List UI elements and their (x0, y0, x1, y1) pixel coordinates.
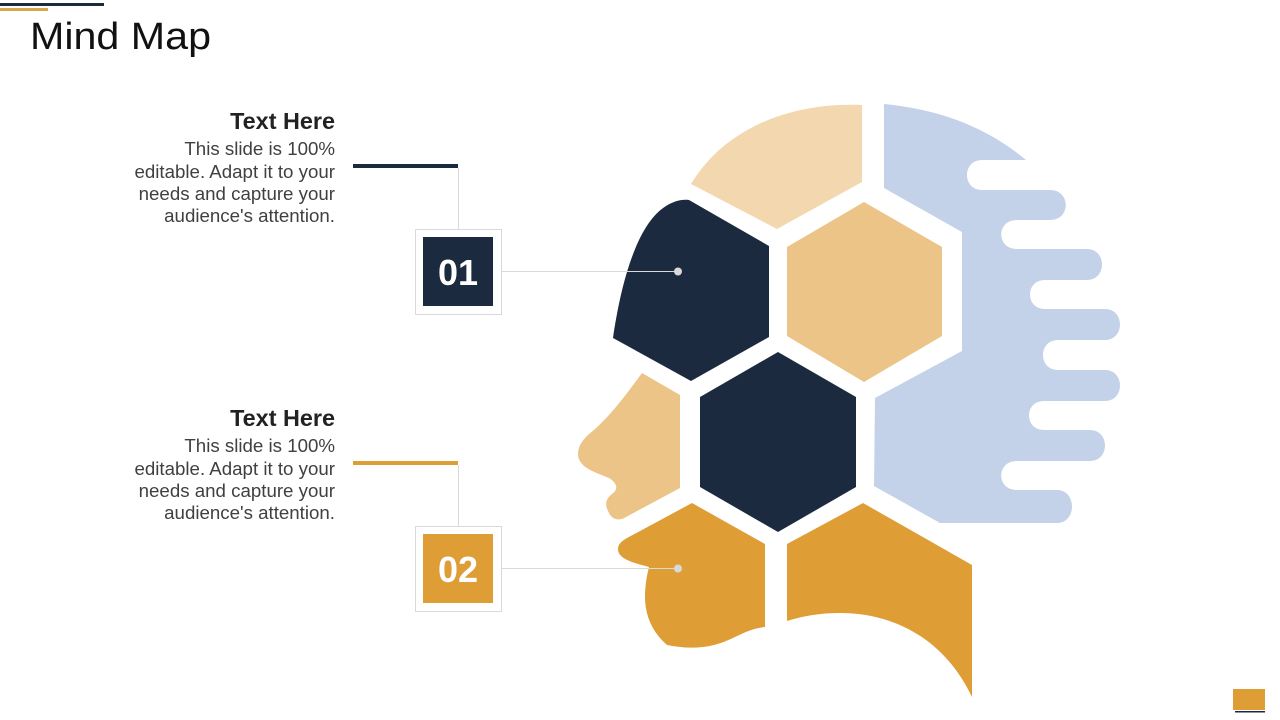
body text: editable. Adapt it to your (134, 161, 335, 182)
badge outline (416, 230, 502, 314)
connector bar (353, 461, 458, 465)
connector lines (458, 168, 678, 272)
body text: needs and capture your (139, 183, 335, 204)
badge fill (423, 237, 493, 306)
body text: This slide is 100% (184, 138, 335, 159)
badge number: 01 (438, 252, 478, 293)
body text: editable. Adapt it to your (134, 458, 335, 479)
segment: neck orange (787, 503, 972, 697)
segment: forehead dark (613, 200, 769, 381)
badge outline (416, 526, 502, 612)
page number marker (1233, 689, 1265, 712)
heading: Text Here (230, 108, 335, 134)
body text (134, 138, 335, 226)
segment: centre hexagon peach (787, 202, 942, 382)
callout 01 (134, 108, 682, 314)
body text: audience's attention. (164, 502, 335, 523)
marker dot (674, 268, 682, 276)
connector lines (458, 465, 678, 568)
badge number: 02 (438, 549, 478, 590)
marker dot (674, 564, 682, 572)
body text: needs and capture your (139, 480, 335, 501)
body text: audience's attention. (164, 205, 335, 226)
segment: crown peach (691, 105, 862, 229)
segment: centre hexagon dark (700, 352, 856, 532)
title: Mind Map (30, 16, 211, 58)
segment: nose peach (578, 373, 680, 519)
segment: back of head blue (874, 104, 1120, 523)
body text (134, 435, 335, 523)
connector bar (353, 164, 458, 168)
segment: mouth and chin orange (618, 503, 765, 648)
head diagram (578, 104, 1120, 697)
callout 02 (134, 405, 682, 612)
badge fill (423, 534, 493, 603)
heading: Text Here (230, 405, 335, 431)
header accent bars (0, 3, 104, 11)
body text: This slide is 100% (184, 435, 335, 456)
